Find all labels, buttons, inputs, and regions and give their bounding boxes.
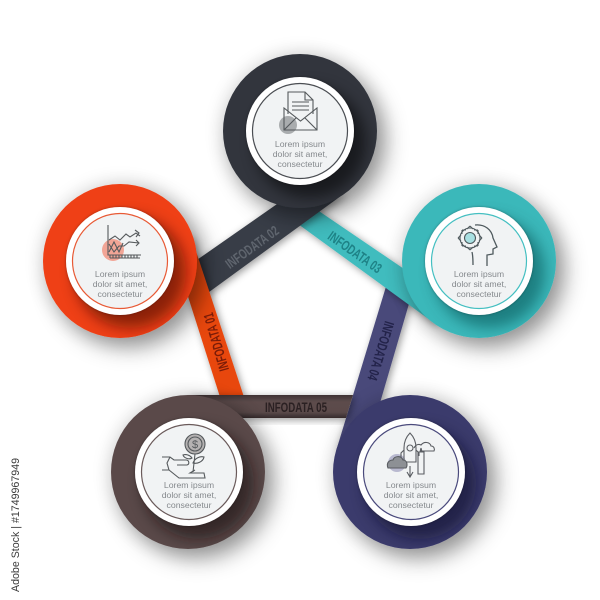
icon: rocket and clouds (387, 433, 434, 477)
soft halo (220, 51, 380, 211)
body text: consectetur (389, 500, 434, 510)
panel: red node (40, 181, 200, 341)
teal disc (402, 184, 556, 338)
disc inner shadow (142, 427, 254, 539)
body text: consectetur (98, 289, 143, 299)
body text: consectetur (278, 159, 323, 169)
inner ring (72, 214, 168, 308)
disc inner shadow (254, 86, 366, 198)
body text: Lorem ipsum (454, 269, 504, 279)
body text: Lorem ipsum (164, 480, 214, 490)
body text: dolor sit amet, (384, 490, 438, 500)
ribbon: red (170, 236, 244, 397)
body text: Lorem ipsum (386, 480, 436, 490)
body text (162, 480, 216, 510)
white plate (357, 418, 465, 526)
ribbon: dark (194, 193, 345, 295)
brown disc (111, 395, 265, 549)
panel: navy node (330, 392, 490, 552)
disc inner shadow (74, 216, 186, 328)
white plate (246, 77, 354, 185)
inner ring (432, 214, 526, 308)
navy disc (333, 395, 487, 549)
ribbon: brown (188, 395, 353, 418)
panel: dark node (220, 51, 380, 211)
body text (384, 480, 438, 510)
body text: dolor sit amet, (273, 149, 327, 159)
icon: envelope with document (279, 92, 317, 134)
body text (93, 269, 147, 299)
inner ring (142, 424, 236, 520)
disc inner shadow (364, 427, 476, 539)
body text: consectetur (457, 289, 502, 299)
label: infodata 05: INFODATA 05 (265, 399, 327, 415)
inner ring (364, 424, 458, 520)
credit text: Adobe Stock | #1749967949 (10, 458, 22, 592)
body text: Lorem ipsum (275, 139, 325, 149)
soft halo (399, 181, 559, 341)
body text (273, 139, 327, 169)
icon: line chart (102, 225, 141, 261)
body text (452, 269, 506, 299)
soft halo (40, 181, 200, 341)
icon: hand with coin plant (162, 434, 205, 478)
ribbon: teal (298, 205, 470, 323)
body text: consectetur (167, 500, 212, 510)
body text: Lorem ipsum (95, 269, 145, 279)
ribbon: navy (336, 280, 413, 460)
red disc (43, 184, 197, 338)
soft halo (330, 392, 490, 552)
icon: hand with coin plant: $ (192, 439, 198, 451)
body text: dolor sit amet, (452, 279, 506, 289)
white plate (135, 418, 243, 526)
icon: head with gear (458, 225, 497, 266)
panel: brown node (108, 392, 268, 552)
body text: dolor sit amet, (93, 279, 147, 289)
label: infodata 02: INFODATA 02 (222, 222, 282, 272)
dark disc (223, 54, 377, 208)
label: infodata 03: INFODATA 03 (325, 228, 385, 276)
body text: dolor sit amet, (162, 490, 216, 500)
inner ring (252, 84, 348, 178)
white plate (425, 207, 533, 315)
label: infodata 01: INFODATA 01 (200, 311, 232, 373)
white plate (66, 207, 174, 315)
panel: teal node (399, 181, 559, 341)
soft halo (108, 392, 268, 552)
disc inner shadow (433, 216, 545, 328)
label: infodata 04: INFODATA 04 (364, 319, 398, 383)
